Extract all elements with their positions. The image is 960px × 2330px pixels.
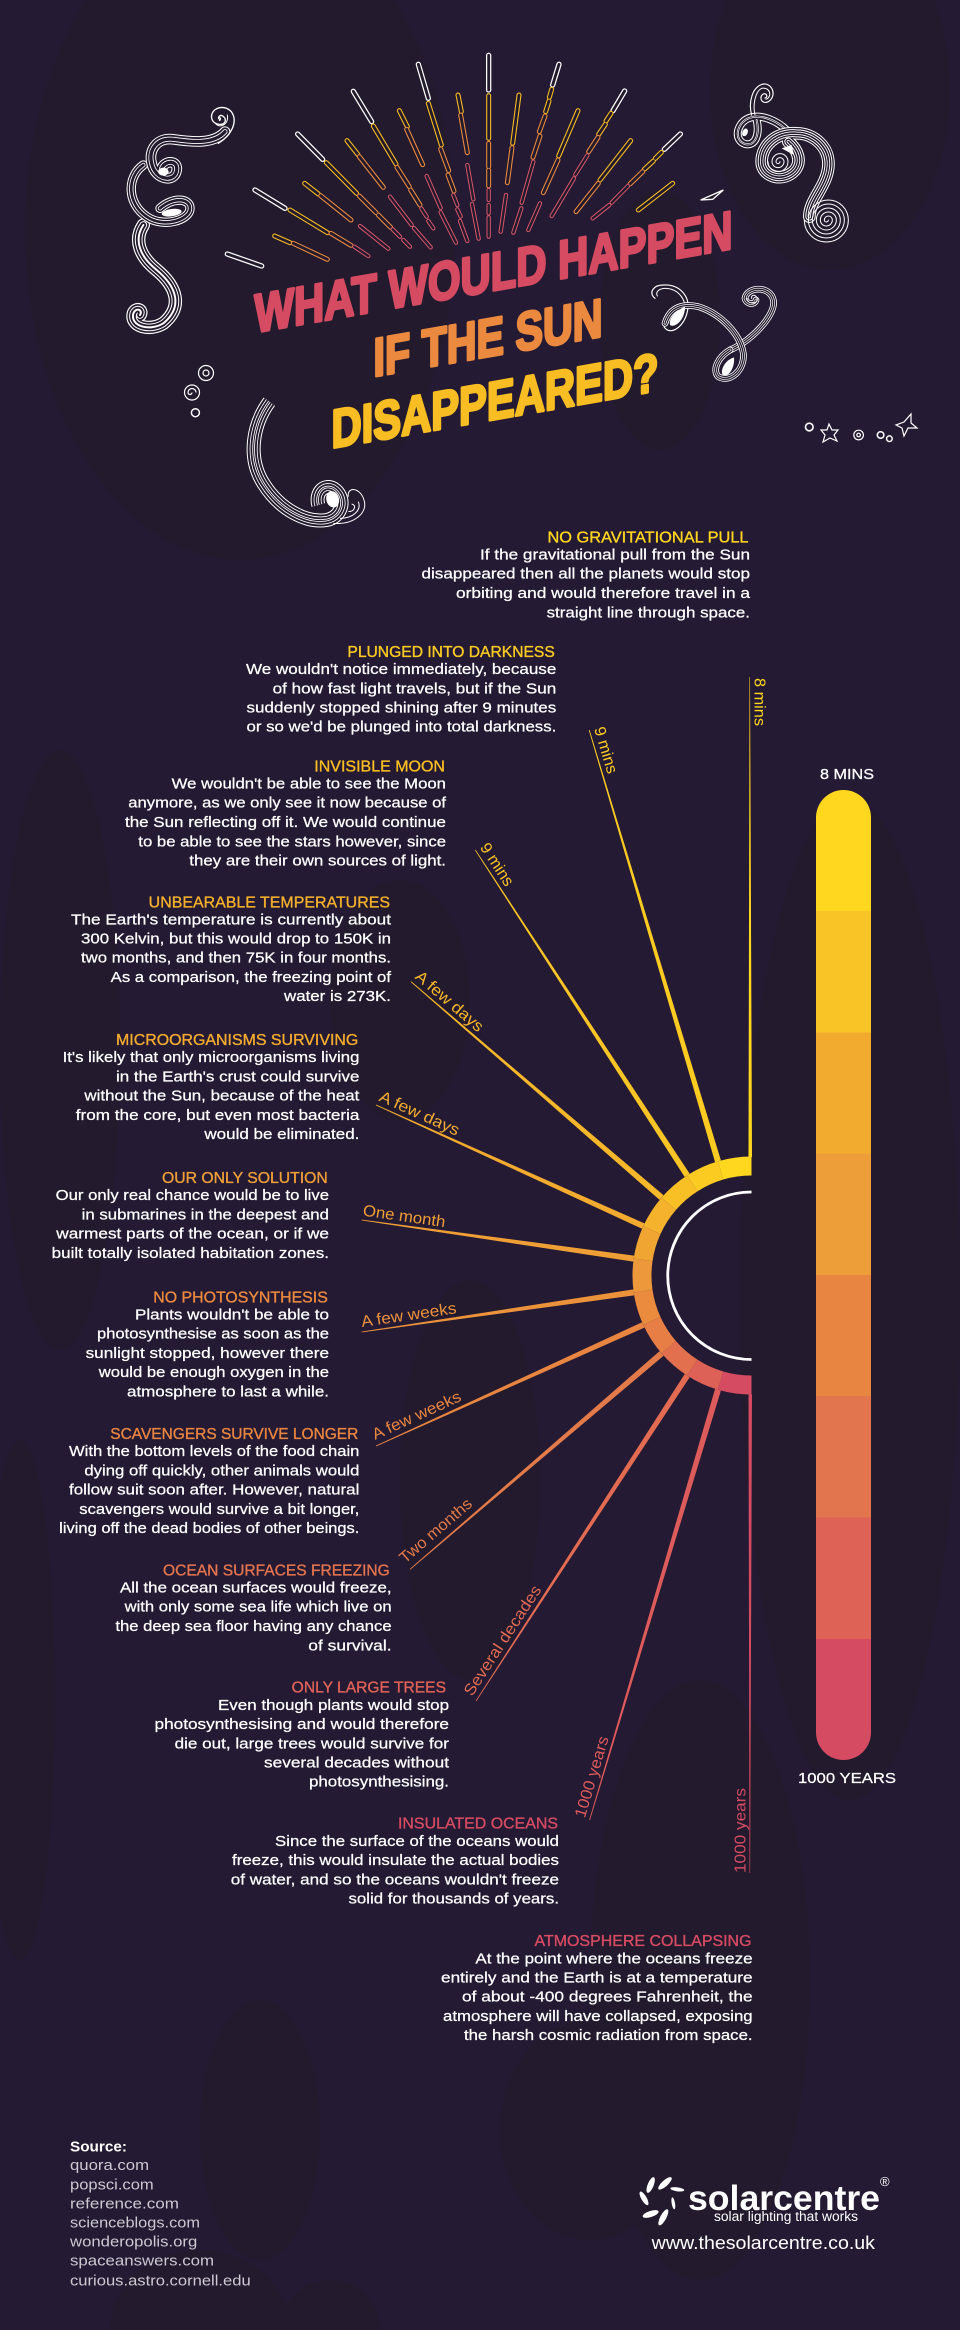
source links xyxy=(69,2157,251,2289)
body text: with only some sea life which live on xyxy=(123,1599,392,1616)
colour bar xyxy=(816,790,871,1760)
ray labels: 9 mins xyxy=(590,725,620,776)
body text: to be able to see the stars however, since xyxy=(138,833,446,850)
body text: without the Sun, because of the heat xyxy=(83,1088,360,1105)
body text: Even though plants would stop xyxy=(218,1697,449,1714)
body text: atmosphere to last a while. xyxy=(127,1383,329,1400)
source links: popsci.com xyxy=(70,2176,154,2193)
body text: living off the dead bodies of other beings. xyxy=(59,1520,359,1537)
source links: reference.com xyxy=(70,2195,179,2212)
body text xyxy=(71,911,392,1005)
ray labels: A few days xyxy=(376,1089,462,1140)
decorative swirl: bottom left xyxy=(254,402,365,523)
body text: two months, and then 75K in four months. xyxy=(81,950,391,967)
body text: With the bottom levels of the food chain xyxy=(69,1443,359,1460)
body text: anymore, as we only see it now because of xyxy=(128,795,447,812)
block: atmosphere collapsing xyxy=(441,1933,753,2044)
block: invisible moon xyxy=(125,759,447,869)
body text: atmosphere will have collapsed, exposing xyxy=(443,2008,753,2025)
body text: We wouldn't be able to see the Moon xyxy=(172,775,446,792)
body text: built totally isolated habitation zones. xyxy=(52,1245,329,1262)
source links: spaceanswers.com xyxy=(70,2253,214,2270)
body text: As a comparison, the freezing point of xyxy=(111,969,392,986)
block: microorganisms surviving xyxy=(63,1032,360,1143)
ray labels: A few weeks xyxy=(370,1389,464,1444)
heading: ATMOSPHERE COLLAPSING xyxy=(534,1933,752,1950)
body text xyxy=(63,1049,360,1143)
sun ring segments xyxy=(632,1156,752,1394)
source links: curious.astro.cornell.edu xyxy=(70,2272,251,2289)
ray labels: Several decades xyxy=(461,1583,545,1699)
block: insulated oceans xyxy=(231,1816,559,1907)
ray labels: One month xyxy=(362,1203,446,1231)
rays xyxy=(362,677,752,1873)
wordmark: solarcentre xyxy=(688,2179,880,2218)
body text: of water, and so the oceans wouldn't freeze xyxy=(231,1871,559,1888)
ray labels: 1000 years xyxy=(572,1734,613,1820)
source links: scienceblogs.com xyxy=(70,2214,200,2231)
body text: they are their own sources of light. xyxy=(189,852,446,869)
body text xyxy=(52,1187,329,1262)
heading: OCEAN SURFACES FREEZING xyxy=(163,1563,390,1580)
body text: It's likely that only microorganisms living xyxy=(63,1049,359,1066)
radial timeline chart xyxy=(360,677,768,1873)
body text: from the core, but even most bacteria xyxy=(76,1107,360,1124)
body text: freeze, this would insulate the actual bodies xyxy=(232,1852,559,1869)
body text: of about -400 degrees Fahrenheit, the xyxy=(462,1989,753,2006)
heading: MICROORGANISMS SURVIVING xyxy=(116,1032,358,1049)
block: scavengers survive longer xyxy=(59,1426,359,1537)
white sun arc xyxy=(668,1192,752,1360)
ray labels: 9 mins xyxy=(476,840,517,890)
heading: PLUNGED INTO DARKNESS xyxy=(347,644,555,661)
body text xyxy=(231,1833,559,1907)
block: ocean surfaces freezing xyxy=(115,1563,392,1654)
decorative swirl: top left xyxy=(131,107,234,327)
body text: 300 Kelvin, but this would drop to 150K in xyxy=(81,930,391,947)
body text: entirely and the Earth is at a temperature xyxy=(441,1969,753,1986)
heading: ONLY LARGE TREES xyxy=(292,1679,446,1696)
body text xyxy=(154,1697,450,1791)
title xyxy=(254,200,732,460)
body text: disappeared then all the planets would stop xyxy=(422,566,750,583)
bottom label: 1000 YEARS xyxy=(798,1770,896,1787)
body text xyxy=(441,1950,753,2044)
block: our only solution xyxy=(52,1170,329,1262)
body text: photosynthesising and would therefore xyxy=(154,1716,449,1733)
ray labels: A few weeks xyxy=(360,1300,458,1331)
heading: SCAVENGERS SURVIVE LONGER xyxy=(110,1426,358,1443)
source links: wonderopolis.org xyxy=(69,2234,197,2251)
body text: straight line through space. xyxy=(547,604,750,621)
body text: of how fast light travels, but if the Sun xyxy=(273,680,556,697)
thermometer scale xyxy=(798,766,896,1787)
sunburst xyxy=(227,55,723,266)
body text: Our only real chance would be to live xyxy=(56,1187,329,1204)
body text: At the point where the oceans freeze xyxy=(475,1950,753,1967)
body text: in the Earth's crust could survive xyxy=(116,1068,359,1085)
body text: the deep sea floor having any chance xyxy=(115,1618,392,1635)
body text: would be eliminated. xyxy=(203,1126,359,1143)
source links: quora.com xyxy=(70,2157,149,2174)
body text: several decades without xyxy=(264,1755,450,1772)
body text: dying off quickly, other animals would xyxy=(84,1462,359,1479)
title: DISAPPEARED? xyxy=(332,342,658,460)
body text: solid for thousands of years. xyxy=(348,1890,559,1907)
body text: in submarines in the deepest and xyxy=(82,1206,329,1223)
body text xyxy=(125,775,447,869)
heading: NO GRAVITATIONAL PULL xyxy=(548,530,749,547)
body text: scavengers would survive a bit longer, xyxy=(79,1501,359,1518)
body text xyxy=(59,1443,359,1537)
top label: 8 MINS xyxy=(820,766,874,783)
decorative swirl: middle right xyxy=(652,285,774,378)
ray labels: Two months xyxy=(397,1495,476,1567)
body text: of survival. xyxy=(308,1637,392,1654)
body text: suddenly stopped shining after 9 minutes xyxy=(246,700,556,717)
body text: The Earth's temperature is currently about xyxy=(71,911,392,928)
body text: water is 273K. xyxy=(283,988,391,1005)
block: no gravitational pull xyxy=(422,530,751,621)
block: unbearable temperatures xyxy=(71,895,392,1005)
decorative swirl: top right xyxy=(738,84,848,242)
body text: the Sun reflecting off it. We would continue xyxy=(125,814,446,831)
heading: INSULATED OCEANS xyxy=(398,1816,558,1833)
ray labels: A few days xyxy=(412,968,486,1036)
decorative dots and stars right xyxy=(806,414,917,442)
body text xyxy=(115,1579,392,1654)
body text: We wouldn't notice immediately, because xyxy=(246,661,556,678)
tagline: solar lighting that works xyxy=(714,2209,858,2224)
body text: photosynthesise as soon as the xyxy=(97,1326,329,1343)
decorative dots left xyxy=(184,366,214,417)
body text: photosynthesising. xyxy=(309,1774,449,1791)
body text xyxy=(246,661,556,736)
logo: solarcentre xyxy=(638,2174,890,2253)
icon: sun leaves xyxy=(638,2175,685,2227)
heading: NO PHOTOSYNTHESIS xyxy=(153,1290,328,1306)
heading: UNBEARABLE TEMPERATURES xyxy=(149,895,390,912)
body text xyxy=(86,1306,329,1400)
block: no photosynthesis xyxy=(86,1290,329,1400)
body text: Plants wouldn't be able to xyxy=(135,1306,329,1323)
ray labels xyxy=(360,678,768,1873)
body text: die out, large trees would survive for xyxy=(175,1735,449,1752)
body text: sunlight stopped, however there xyxy=(86,1345,329,1362)
ray labels: 8 mins xyxy=(750,678,768,726)
heading: INVISIBLE MOON xyxy=(314,759,445,776)
body text: Since the surface of the oceans would xyxy=(275,1833,559,1850)
body text: orbiting and would therefore travel in a xyxy=(456,585,751,602)
body text: the harsh cosmic radiation from space. xyxy=(464,2027,753,2044)
body text: would be enough oxygen in the xyxy=(98,1364,329,1381)
registered mark: ® xyxy=(880,2174,890,2189)
heading: OUR ONLY SOLUTION xyxy=(162,1170,328,1187)
body text: warmest parts of the ocean, or if we xyxy=(55,1226,329,1243)
title: WHAT WOULD HAPPEN xyxy=(254,200,732,344)
body text xyxy=(422,546,751,621)
sources list xyxy=(69,2138,251,2289)
title: IF THE SUN xyxy=(374,288,602,388)
sources heading: Source: xyxy=(70,2138,127,2155)
website: www.thesolarcentre.co.uk xyxy=(651,2233,876,2253)
body text: follow suit soon after. However, natural xyxy=(69,1482,359,1499)
body text: All the ocean surfaces would freeze, xyxy=(120,1579,392,1596)
body text: or so we'd be plunged into total darkness. xyxy=(246,719,556,736)
block: plunged into darkness xyxy=(246,644,556,736)
block: only large trees xyxy=(154,1679,450,1791)
body text: If the gravitational pull from the Sun xyxy=(480,546,750,563)
ray labels: 1000 years xyxy=(732,1788,750,1873)
